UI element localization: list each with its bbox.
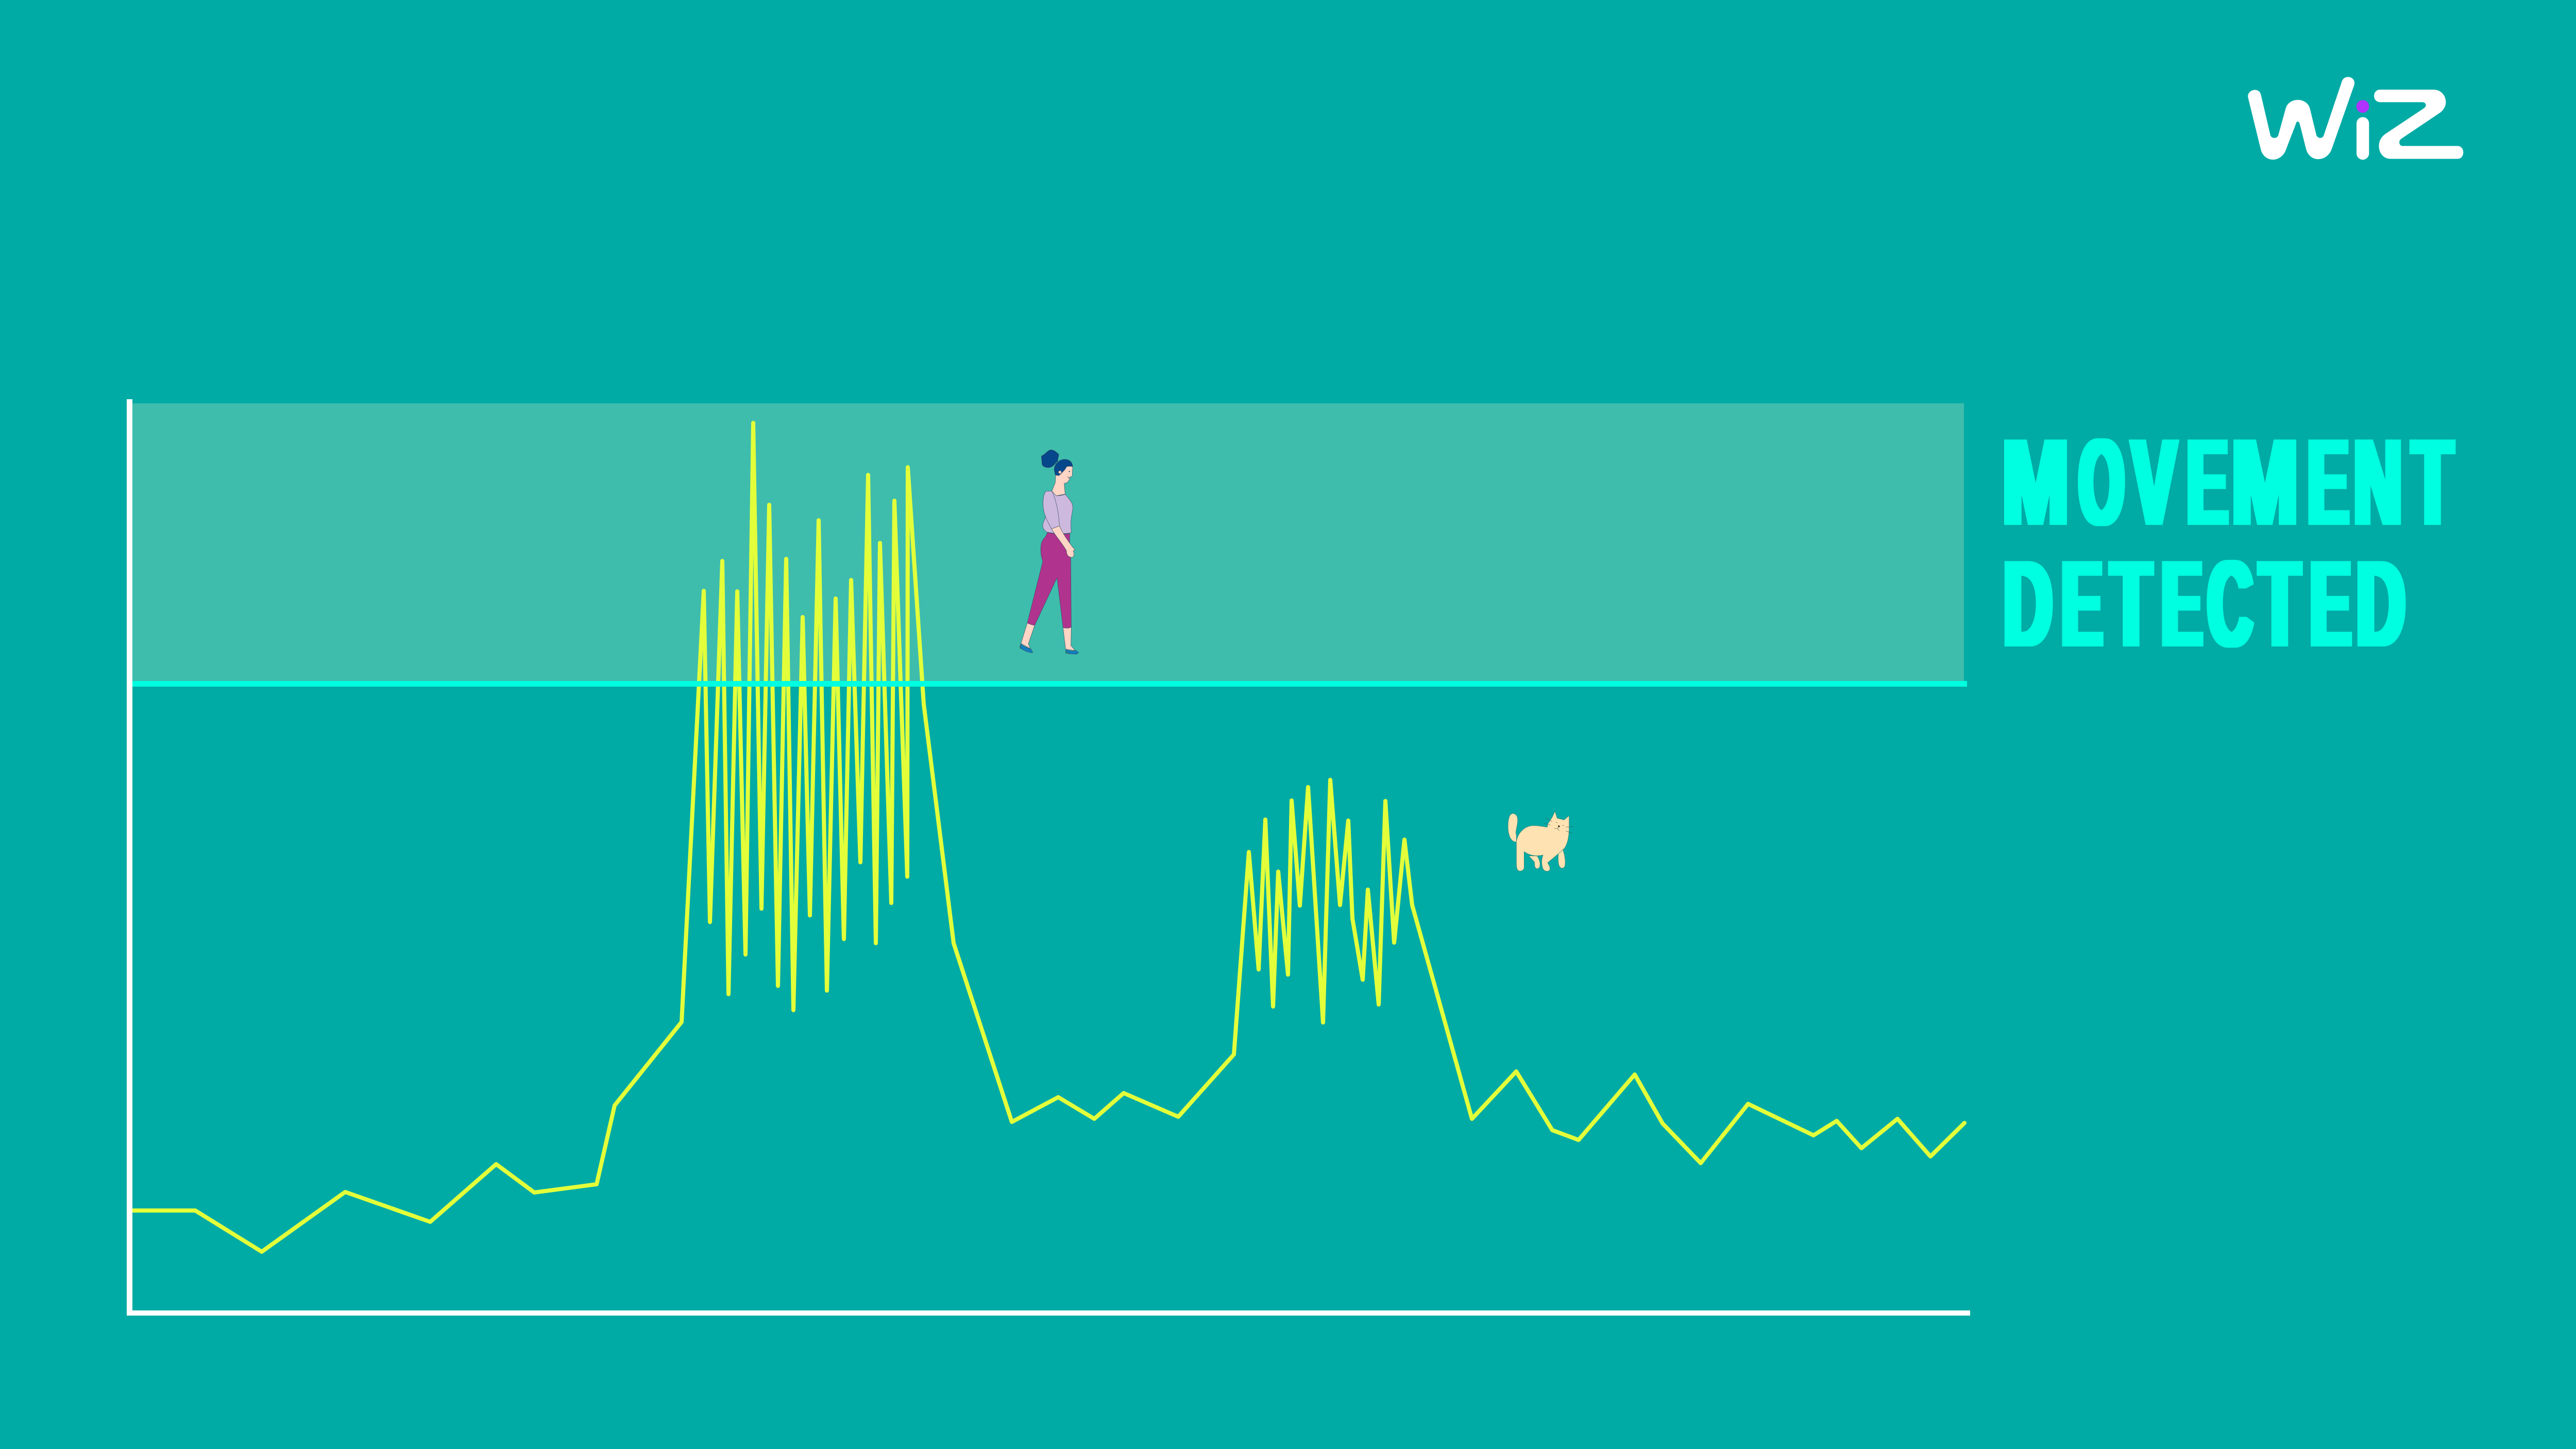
- heading: movement detected: M: [2232, 414, 2298, 551]
- icon: woman walking: [1020, 450, 1079, 654]
- heading: movement detected: N: [2354, 414, 2402, 551]
- line chart: motion signal: [132, 423, 1964, 1252]
- heading: movement detected: D: [2357, 536, 2405, 672]
- panel: movement detection zone: [132, 403, 1964, 681]
- heading: movement detected: V: [2132, 414, 2176, 551]
- heading: movement detected: O: [2079, 414, 2124, 551]
- chart axes: [127, 399, 1970, 1316]
- logo: WiZ: [2248, 77, 2463, 160]
- threshold line: [132, 681, 1967, 687]
- heading: movement detected: E: [2310, 536, 2351, 672]
- heading: movement detected: M: [2003, 414, 2069, 551]
- heading: movement detected: C: [2208, 536, 2252, 672]
- heading: movement detected: T: [2111, 536, 2151, 672]
- heading: movement detected: E: [2062, 536, 2102, 672]
- heading: movement detected: E: [2162, 536, 2202, 672]
- heading: movement detected: D: [2004, 536, 2052, 672]
- heading: movement detected: T: [2412, 414, 2453, 551]
- icon: cat: [1508, 811, 1573, 871]
- heading: movement detected: T: [2260, 536, 2300, 672]
- heading: movement detected: E: [2187, 414, 2228, 551]
- heading: movement detected: E: [2308, 414, 2348, 551]
- heading: movement detected: [2003, 414, 2453, 672]
